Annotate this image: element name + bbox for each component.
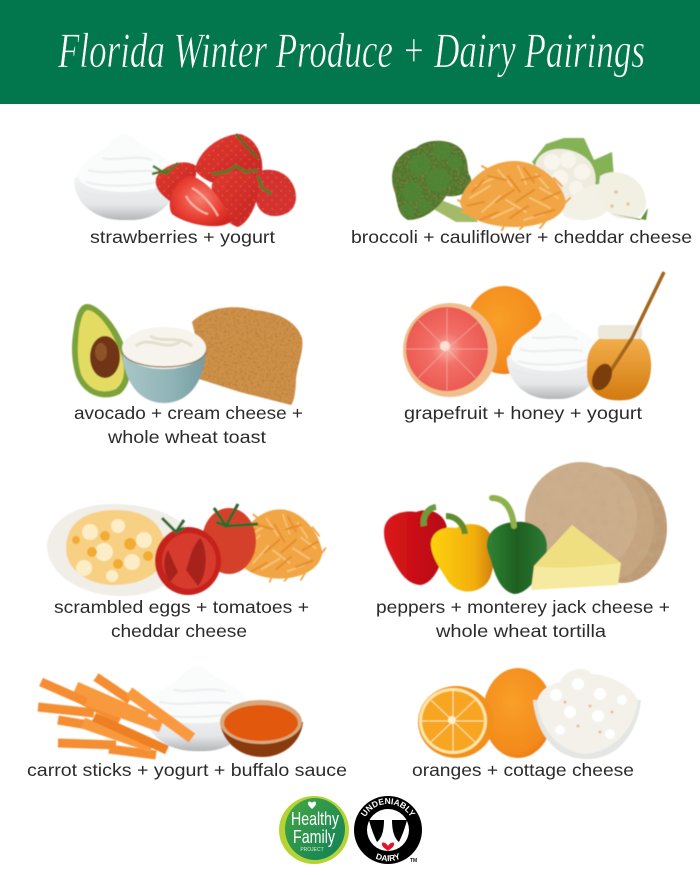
caption bbox=[54, 597, 309, 641]
icon: cream cheese bowl bbox=[122, 327, 206, 403]
icon: tomato cut bbox=[155, 518, 221, 595]
caption: strawberries + yogurt bbox=[90, 227, 275, 247]
panel: eggs + tomatoes + cheddar bbox=[47, 504, 326, 596]
icon: buffalo sauce bowl bbox=[220, 700, 303, 757]
panel: broccoli + cauliflower + cheddar bbox=[392, 138, 648, 230]
caption: carrot sticks + yogurt + buffalo sauce bbox=[27, 760, 347, 780]
panel: peppers + monterey jack + tortilla bbox=[384, 462, 667, 594]
logo: Undeniably Dairy: DAIRY bbox=[376, 853, 399, 862]
logo: Undeniably Dairy: TM bbox=[410, 858, 417, 864]
icon: orange half bbox=[418, 686, 494, 758]
caption: scrambled eggs + tomatoes + bbox=[54, 597, 309, 617]
caption: peppers + monterey jack cheese + bbox=[376, 597, 670, 617]
caption: broccoli + cauliflower + cheddar cheese bbox=[351, 227, 692, 247]
caption: oranges + cottage cheese bbox=[412, 760, 634, 780]
icon: tomato whole bbox=[202, 504, 258, 574]
panel: carrots + yogurt + buffalo sauce bbox=[38, 666, 303, 757]
icon: cottage cheese bowl bbox=[533, 669, 641, 759]
icon: whole orange bbox=[483, 668, 553, 758]
icon: whole wheat tortillas bbox=[525, 462, 667, 583]
panel: strawberries + yogurt bbox=[74, 134, 296, 227]
icon: shredded cheddar bbox=[234, 509, 326, 582]
icon: yellow pepper bbox=[431, 516, 494, 592]
caption bbox=[74, 403, 303, 447]
icon: carrot sticks bbox=[38, 677, 192, 755]
icon: monterey jack wedge bbox=[531, 525, 621, 590]
icon: whole orange-grapefruit bbox=[465, 286, 543, 374]
caption bbox=[376, 597, 670, 641]
icon: yogurt bowl bbox=[145, 666, 252, 751]
icon: avocado bbox=[72, 304, 130, 397]
panel: grapefruit + honey + yogurt bbox=[403, 272, 664, 400]
icon: shredded cheddar bbox=[458, 161, 570, 230]
icon: green pepper bbox=[487, 498, 547, 594]
icon: honey jar with dipper bbox=[587, 272, 664, 400]
icon: grapefruit half bbox=[403, 303, 497, 397]
logo: Healthy Family Project: Family bbox=[293, 827, 335, 847]
logo: Undeniably Dairy bbox=[354, 796, 422, 864]
caption: whole wheat tortilla bbox=[435, 621, 606, 641]
caption: avocado + cream cheese + bbox=[74, 403, 303, 423]
panel: avocado + cream cheese + toast bbox=[72, 304, 302, 405]
icon: toast bbox=[192, 307, 302, 405]
logo: Healthy Family Project: PROJECT bbox=[300, 847, 324, 853]
caption: whole wheat toast bbox=[107, 427, 266, 447]
logo: Undeniably Dairy: UNDENIABLY bbox=[360, 798, 416, 816]
logo: Healthy Family Project bbox=[279, 796, 349, 864]
icon: yogurt bowl bbox=[507, 313, 601, 399]
icon: yogurt bowl bbox=[74, 134, 178, 220]
icon: red pepper bbox=[384, 507, 447, 585]
caption: cheddar cheese bbox=[111, 621, 247, 641]
icon: strawberries bbox=[152, 134, 296, 227]
caption: grapefruit + honey + yogurt bbox=[404, 403, 642, 423]
panel: oranges + cottage cheese bbox=[418, 668, 641, 759]
title banner bbox=[0, 0, 700, 104]
logo: Healthy Family Project: Healthy bbox=[291, 809, 339, 829]
icon: cauliflower bbox=[532, 138, 648, 220]
icon: broccoli bbox=[392, 141, 478, 222]
icon: plate of scrambled eggs bbox=[47, 504, 194, 596]
